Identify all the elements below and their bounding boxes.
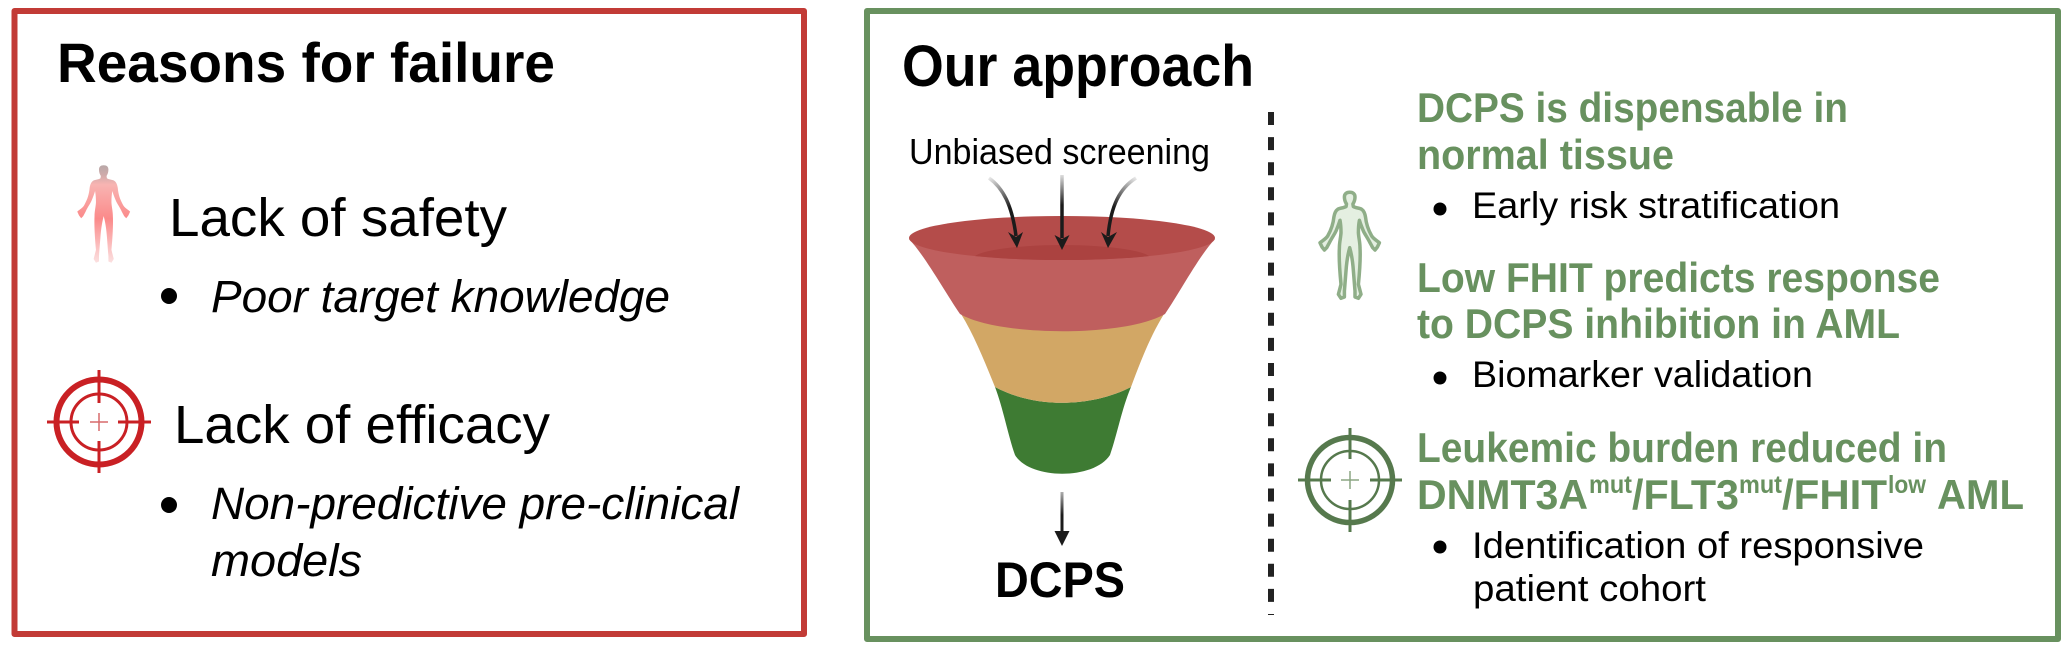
heading: reasons for failure: Reasons for failure: [57, 31, 555, 94]
icon: red human body: [77, 165, 130, 263]
arrow: right screening arrow: [1101, 178, 1136, 248]
bullet: non-predictive pre-clinical models: Non-predictive pre-clinical: [211, 478, 741, 529]
label: DCPS: DCPS: [995, 552, 1125, 608]
panel: our approach: [867, 11, 2058, 639]
block: leukemic burden: DNMT3A: [1417, 471, 1588, 518]
block: leukemic burden: mut: [1589, 471, 1633, 499]
chart: screening funnel: [909, 216, 1215, 474]
arrow: funnel output: [1054, 492, 1070, 546]
arrow: left screening arrow: [989, 178, 1023, 248]
funnel rim: [909, 216, 1215, 260]
block: leukemic burden: [1417, 424, 2024, 609]
bullet: poor target knowledge: Poor target knowledge: [211, 271, 670, 322]
block: leukemic burden: patient cohort: [1473, 568, 1707, 609]
icon: green human body: [1320, 192, 1379, 298]
funnel tier: green: [995, 387, 1131, 474]
panel: reasons for failure: [14, 11, 804, 634]
icon: red target: [47, 370, 151, 473]
block: DCPS dispensable: [1417, 84, 1848, 226]
block: leukemic burden: Leukemic burden reduced in: [1417, 424, 1947, 471]
block: leukemic burden: /FHIT: [1782, 471, 1887, 518]
block: low FHIT: to DCPS inhibition in AML: [1417, 300, 1900, 347]
block: DCPS dispensable: Early risk stratification: [1472, 185, 1840, 226]
heading: our approach: Our approach: [902, 34, 1254, 99]
block: leukemic burden: AML: [1937, 471, 2024, 518]
text: lack of efficacy: Lack of efficacy: [174, 395, 550, 455]
block: leukemic burden: Identification of responsive: [1472, 525, 1924, 566]
block: DCPS dispensable: DCPS is dispensable in: [1417, 84, 1848, 131]
funnel tier: red: [909, 239, 1215, 331]
label: unbiased screening: Unbiased screening: [909, 131, 1210, 172]
bullet: non-predictive pre-clinical models: models: [211, 535, 362, 586]
arrow: center screening arrow: [1054, 175, 1070, 250]
block: low FHIT: Low FHIT predicts response: [1417, 254, 1940, 301]
block: leukemic burden: mut: [1739, 471, 1783, 499]
funnel tier: tan: [961, 314, 1164, 403]
bullet: non-predictive pre-clinical models: [161, 478, 741, 586]
block: DCPS dispensable: normal tissue: [1417, 131, 1674, 178]
block: low FHIT: [1417, 254, 1940, 395]
block: leukemic burden: low: [1888, 471, 1926, 499]
text: lack of safety: Lack of safety: [169, 188, 507, 248]
icon: green target: [1298, 428, 1402, 532]
block: leukemic burden: /FLT3: [1632, 471, 1739, 518]
block: low FHIT: Biomarker validation: [1472, 354, 1813, 395]
